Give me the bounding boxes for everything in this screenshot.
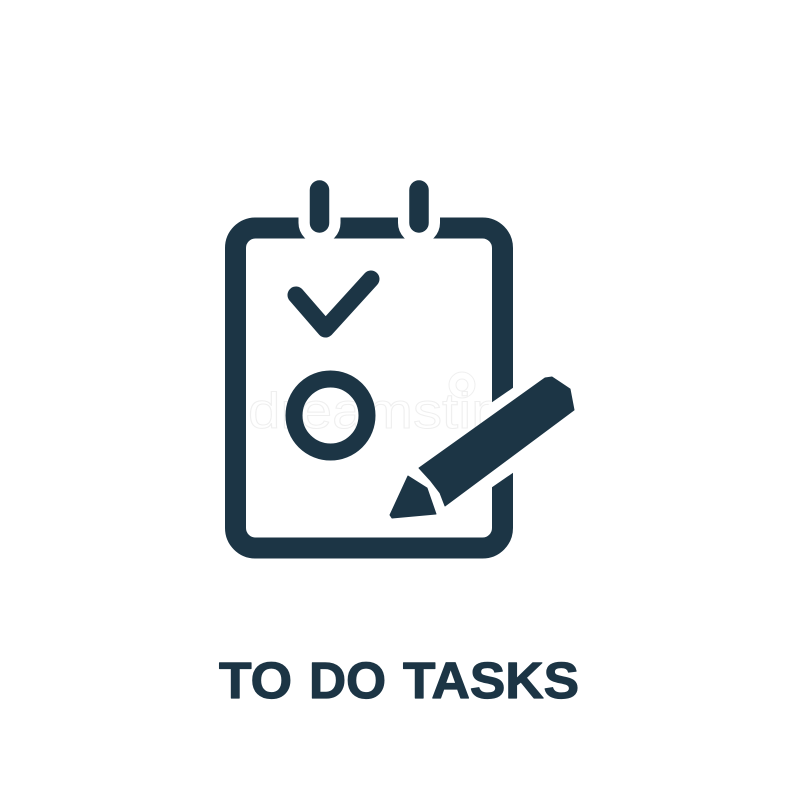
title: TO [219,652,292,709]
icon: empty task circle [294,379,367,452]
icon: clipboard to-do list with pencil [236,170,574,548]
clipboard frame [236,228,502,548]
watermark: dreamstime [248,383,552,439]
icon: pencil tip [390,476,436,518]
icon: left binder ring [295,170,345,223]
icon: right binder ring [395,170,443,223]
title: TASKS [403,652,579,709]
icon: pencil body [419,377,574,506]
icon: check mark [296,279,371,329]
pencil gap cut out of the frame [488,385,517,490]
title: DO [309,652,386,709]
